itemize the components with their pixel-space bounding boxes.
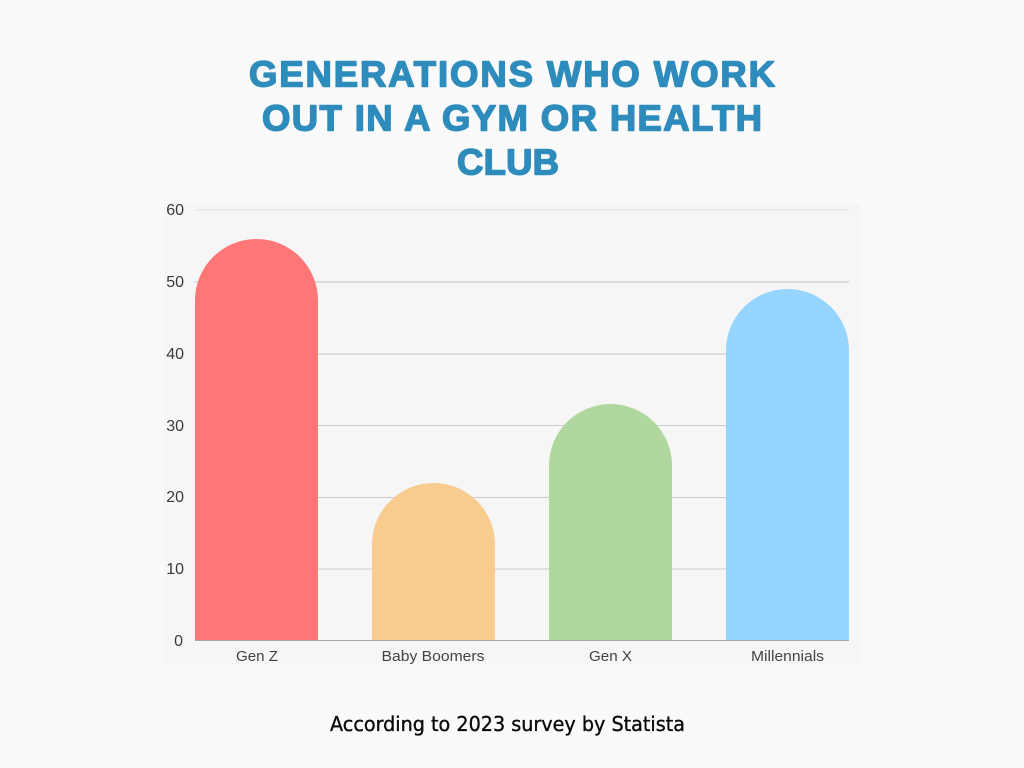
source note: According to 2023 survey by Statista	[330, 712, 685, 736]
y axis labels: 60	[166, 202, 184, 219]
y axis labels: 0	[174, 633, 183, 650]
x axis labels: Millennials	[751, 648, 824, 665]
x axis labels: Gen X	[589, 648, 632, 665]
x axis labels	[236, 648, 824, 665]
title: CLUB	[457, 142, 559, 182]
y axis labels: 40	[166, 346, 184, 363]
title: GENERATIONS WHO WORK	[249, 54, 776, 94]
y axis labels: 50	[166, 274, 184, 291]
x axis labels: Baby Boomers	[382, 648, 484, 665]
y axis labels: 30	[166, 418, 184, 435]
bar: Gen X, 33	[549, 404, 672, 640]
y axis labels: 20	[166, 489, 184, 506]
bar: Gen Z, 56	[195, 239, 318, 640]
title	[249, 54, 776, 182]
bar: Baby Boomers, 22	[372, 483, 495, 640]
x axis labels: Gen Z	[236, 648, 278, 665]
bar: Millennials, 49	[726, 289, 849, 640]
y axis labels	[166, 202, 184, 650]
title: OUT IN A GYM OR HEALTH	[262, 98, 762, 138]
y axis labels: 10	[166, 561, 184, 578]
panel: bar chart	[164, 202, 860, 665]
